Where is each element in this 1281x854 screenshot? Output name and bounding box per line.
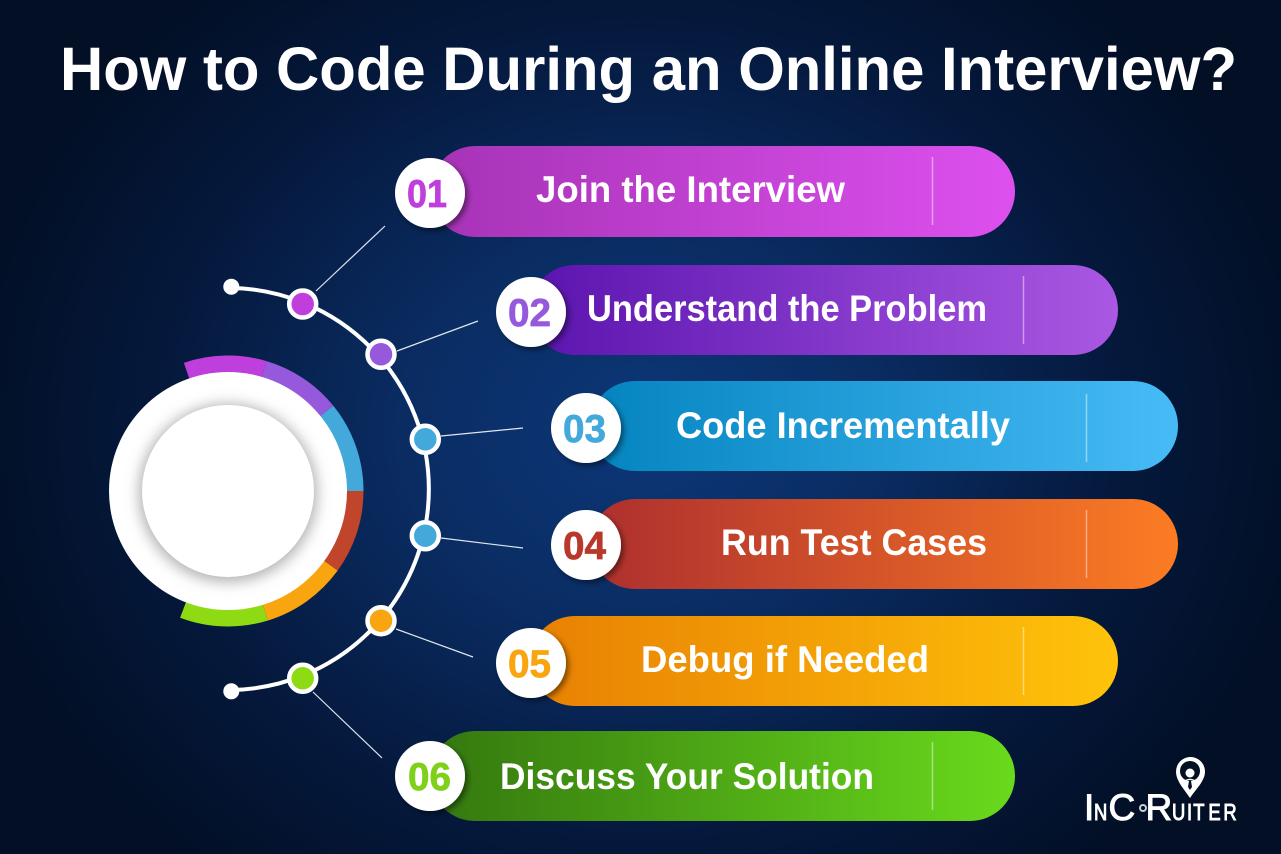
wordmark: R	[1146, 787, 1172, 828]
step 04	[551, 499, 1178, 589]
badge	[395, 741, 465, 811]
ring segment: red	[331, 491, 355, 566]
badge	[551, 393, 621, 463]
number: 01	[407, 173, 447, 216]
ring segment: green	[183, 610, 265, 618]
arc end dot bottom	[223, 683, 239, 699]
badge	[496, 628, 566, 698]
icon: small gear mark	[1140, 805, 1146, 811]
wordmark: C	[1108, 787, 1135, 828]
divider	[1086, 510, 1088, 578]
node 2	[368, 341, 394, 368]
badge	[496, 277, 566, 347]
ring segment: violet	[264, 369, 327, 411]
inner white disc	[142, 405, 314, 577]
pill	[530, 616, 1118, 706]
step 06	[395, 731, 1015, 821]
pill	[430, 146, 1015, 237]
outer white disc	[109, 372, 347, 610]
number: 03	[563, 408, 606, 451]
node 4	[412, 522, 439, 549]
pill	[590, 499, 1178, 589]
number: 06	[408, 756, 451, 799]
step 02	[496, 265, 1118, 355]
label: Debug if Needed	[641, 639, 929, 680]
timeline arc with nodes	[223, 279, 439, 699]
wordmark: UITER	[1172, 800, 1237, 826]
label: Run Test Cases	[721, 522, 987, 563]
ring segment: blue	[327, 411, 355, 491]
divider	[932, 742, 934, 810]
wordmark: I	[1084, 787, 1094, 828]
number: 05	[508, 643, 551, 686]
arc	[231, 288, 429, 690]
divider	[1022, 627, 1024, 695]
badge	[395, 158, 465, 228]
label: Code Incrementally	[676, 405, 1010, 446]
icon: location pin with person	[1176, 757, 1205, 798]
central ring graphic	[109, 364, 355, 618]
ring segment: purple	[187, 364, 264, 371]
label: Join the Interview	[536, 169, 845, 210]
number: 02	[508, 292, 551, 335]
step 05	[496, 616, 1118, 706]
step 01	[395, 146, 1015, 237]
wordmark: N	[1094, 800, 1107, 826]
divider	[1022, 276, 1024, 344]
badge	[551, 510, 621, 580]
label: Discuss Your Solution	[500, 756, 874, 797]
pill	[590, 381, 1178, 471]
pill	[430, 731, 1015, 821]
logo	[1084, 757, 1237, 828]
title: How to Code During an Online Interview?	[60, 35, 1237, 103]
pill	[530, 265, 1118, 355]
node 3	[412, 426, 439, 453]
label: Understand the Problem	[587, 288, 987, 329]
arc end dot top	[223, 279, 239, 295]
node 1	[289, 290, 316, 318]
divider	[932, 157, 934, 225]
ring segment: orange	[265, 566, 331, 612]
step 03	[551, 381, 1178, 471]
node 5	[368, 607, 394, 634]
inner disc shadow	[139, 404, 317, 582]
divider	[1086, 394, 1088, 462]
connector lines	[313, 226, 523, 758]
node 6	[289, 665, 316, 692]
wordmark	[1084, 787, 1237, 828]
number: 04	[563, 525, 606, 568]
